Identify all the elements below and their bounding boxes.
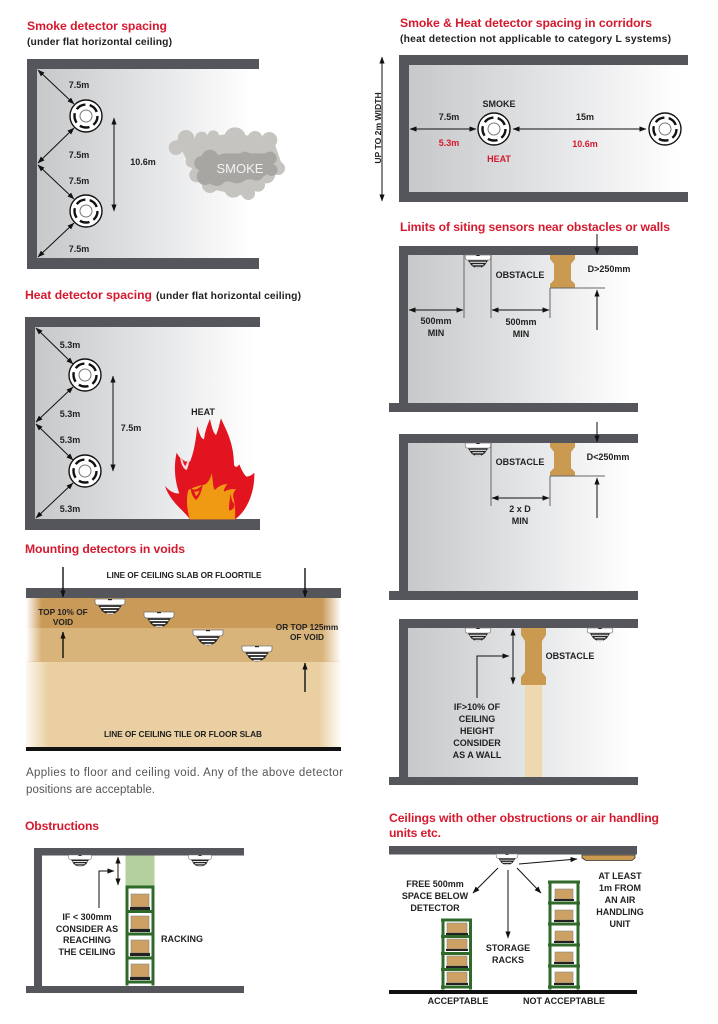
labels: UP TO 2m WIDTH xyxy=(373,92,383,164)
labels: MIN xyxy=(428,328,444,338)
detectors xyxy=(478,113,681,145)
labels: SMOKE xyxy=(482,99,516,109)
subtitle: heat under flat ceiling: (under flat horizontal ceiling) xyxy=(156,291,301,302)
distance labels xyxy=(60,340,141,514)
label: heat: HEAT xyxy=(191,407,215,417)
text block: void note: positions are acceptable. xyxy=(26,784,155,796)
labels: D>250mm xyxy=(588,264,630,274)
labels: 5.3m xyxy=(439,138,459,148)
labels: OR TOP 125mm xyxy=(276,622,338,632)
panel: limit D under 250mm xyxy=(389,422,638,600)
labels: IF < 300mm xyxy=(62,912,112,922)
labels: FREE 500mm xyxy=(406,879,464,889)
arrows xyxy=(382,57,646,201)
labels: REACHING xyxy=(63,935,111,945)
panel: limit D over 250mm xyxy=(389,234,638,412)
air handling unit xyxy=(582,855,635,860)
distance labels: 7.5m xyxy=(69,176,89,186)
title: ceilings with other obstructions: Ceilings with other obstructions or air handling xyxy=(389,811,659,825)
labels xyxy=(496,452,629,526)
labels: HEIGHT xyxy=(460,726,494,736)
labels: TOP 10% OF xyxy=(38,607,88,617)
panel: corridors xyxy=(373,55,688,202)
labels: 15m xyxy=(576,112,594,122)
labels: D<250mm xyxy=(587,452,629,462)
labels: AS A WALL xyxy=(453,750,502,760)
spacing arrows xyxy=(38,70,114,257)
cloud: smoke xyxy=(169,127,285,200)
guides and arrows xyxy=(491,422,605,518)
labels: 1m FROM xyxy=(599,883,641,893)
panel: voids xyxy=(26,567,341,751)
distance labels: 5.3m xyxy=(60,435,80,445)
labels: RACKS xyxy=(492,955,524,965)
labels: OBSTACLE xyxy=(496,457,544,467)
distance labels: 5.3m xyxy=(60,504,80,514)
labels: NOT ACCEPTABLE xyxy=(523,996,605,1006)
distance labels: 7.5m xyxy=(121,423,141,433)
labels: UNIT xyxy=(610,919,631,929)
labels: THE CEILING xyxy=(58,947,116,957)
detector: top xyxy=(69,359,101,391)
labels xyxy=(402,871,644,1006)
subtitle: under flat horizontal ceiling: (under flat horizontal ceiling) xyxy=(27,37,172,48)
labels: STORAGE xyxy=(486,943,530,953)
icon: flame xyxy=(165,418,254,519)
title: corridors: Smoke & Heat detector spacing in corridors xyxy=(400,16,652,30)
labels: DETECTOR xyxy=(410,903,460,913)
arrows xyxy=(63,567,305,692)
detector xyxy=(496,854,518,865)
rack: not acceptable xyxy=(548,880,580,990)
arrows xyxy=(473,859,577,938)
labels: IF>10% OF xyxy=(454,702,501,712)
panel: obstructions xyxy=(26,848,244,993)
labels: CONSIDER AS xyxy=(56,924,118,934)
distance labels: 10.6m xyxy=(130,157,156,167)
panel: obstacle as wall xyxy=(389,619,638,785)
distance labels: 7.5m xyxy=(69,244,89,254)
labels: 10.6m xyxy=(572,139,598,149)
detectors xyxy=(95,599,272,662)
labels: AN AIR xyxy=(605,895,636,905)
detector: bottom xyxy=(69,455,101,487)
labels: OF VOID xyxy=(290,632,324,642)
title: obstructions: Obstructions xyxy=(25,819,99,833)
labels: MIN xyxy=(513,329,529,339)
arrows xyxy=(99,857,118,908)
arrows xyxy=(477,629,513,698)
obstacle xyxy=(521,628,546,685)
distance labels: 5.3m xyxy=(60,409,80,419)
labels xyxy=(56,912,203,957)
labels xyxy=(38,570,338,739)
labels: OBSTACLE xyxy=(496,270,544,280)
labels xyxy=(420,264,630,339)
labels xyxy=(373,92,598,164)
title: smoke detector spacing: Smoke detector spacing xyxy=(27,19,167,33)
title: heat detector spacing: Heat detector spacing xyxy=(25,288,152,302)
labels: LINE OF CEILING TILE OR FLOOR SLAB xyxy=(104,729,262,739)
distance labels: 5.3m xyxy=(60,340,80,350)
distance labels xyxy=(69,80,156,254)
panel: heat detector spacing xyxy=(25,317,260,530)
panel: smoke detector spacing xyxy=(27,59,285,269)
labels: 500mm xyxy=(505,317,537,327)
detector: bottom xyxy=(70,195,102,227)
labels: RACKING xyxy=(161,934,203,944)
labels: HEAT xyxy=(487,154,511,164)
labels: CONSIDER xyxy=(453,738,501,748)
labels: 7.5m xyxy=(439,112,459,122)
rack xyxy=(126,886,154,986)
distance labels: 7.5m xyxy=(69,80,89,90)
labels: CEILING xyxy=(459,714,495,724)
labels: ACCEPTABLE xyxy=(428,996,488,1006)
labels: 2 x D xyxy=(509,504,531,514)
detector: top xyxy=(70,100,102,132)
obstacle xyxy=(550,443,575,476)
label: smoke: SMOKE xyxy=(217,161,264,176)
title: limits of siting: Limits of siting sensors near obstacles or walls xyxy=(400,220,670,234)
detectors xyxy=(465,628,613,641)
detector xyxy=(465,255,491,268)
labels: OBSTACLE xyxy=(546,651,594,661)
labels: HANDLING xyxy=(596,907,644,917)
spacing arrows xyxy=(36,328,113,518)
distance labels: 7.5m xyxy=(69,150,89,160)
labels: SPACE BELOW xyxy=(402,891,469,901)
text block: void note: Applies to floor and ceiling void. Any of the above detector xyxy=(26,767,343,779)
detectors xyxy=(69,855,211,867)
guides and arrows xyxy=(409,234,605,330)
labels: LINE OF CEILING SLAB OR FLOORTILE xyxy=(106,570,262,580)
title: ceilings with other obstructions: units etc. xyxy=(389,826,441,840)
rack: acceptable xyxy=(441,918,472,990)
text block: void note xyxy=(26,767,343,796)
labels: VOID xyxy=(53,617,73,627)
obstacle xyxy=(550,255,575,288)
labels: AT LEAST xyxy=(598,871,642,881)
labels: 500mm xyxy=(420,316,452,326)
subtitle: corridors: (heat detection not applicable to category L systems) xyxy=(400,34,671,45)
detector xyxy=(465,443,491,456)
title: ceilings with other obstructions xyxy=(389,811,659,840)
labels xyxy=(453,651,594,760)
title: mounting detectors in voids: Mounting detectors in voids xyxy=(25,542,185,556)
panel: ceilings with obstructions xyxy=(389,846,644,1006)
labels: MIN xyxy=(512,516,528,526)
